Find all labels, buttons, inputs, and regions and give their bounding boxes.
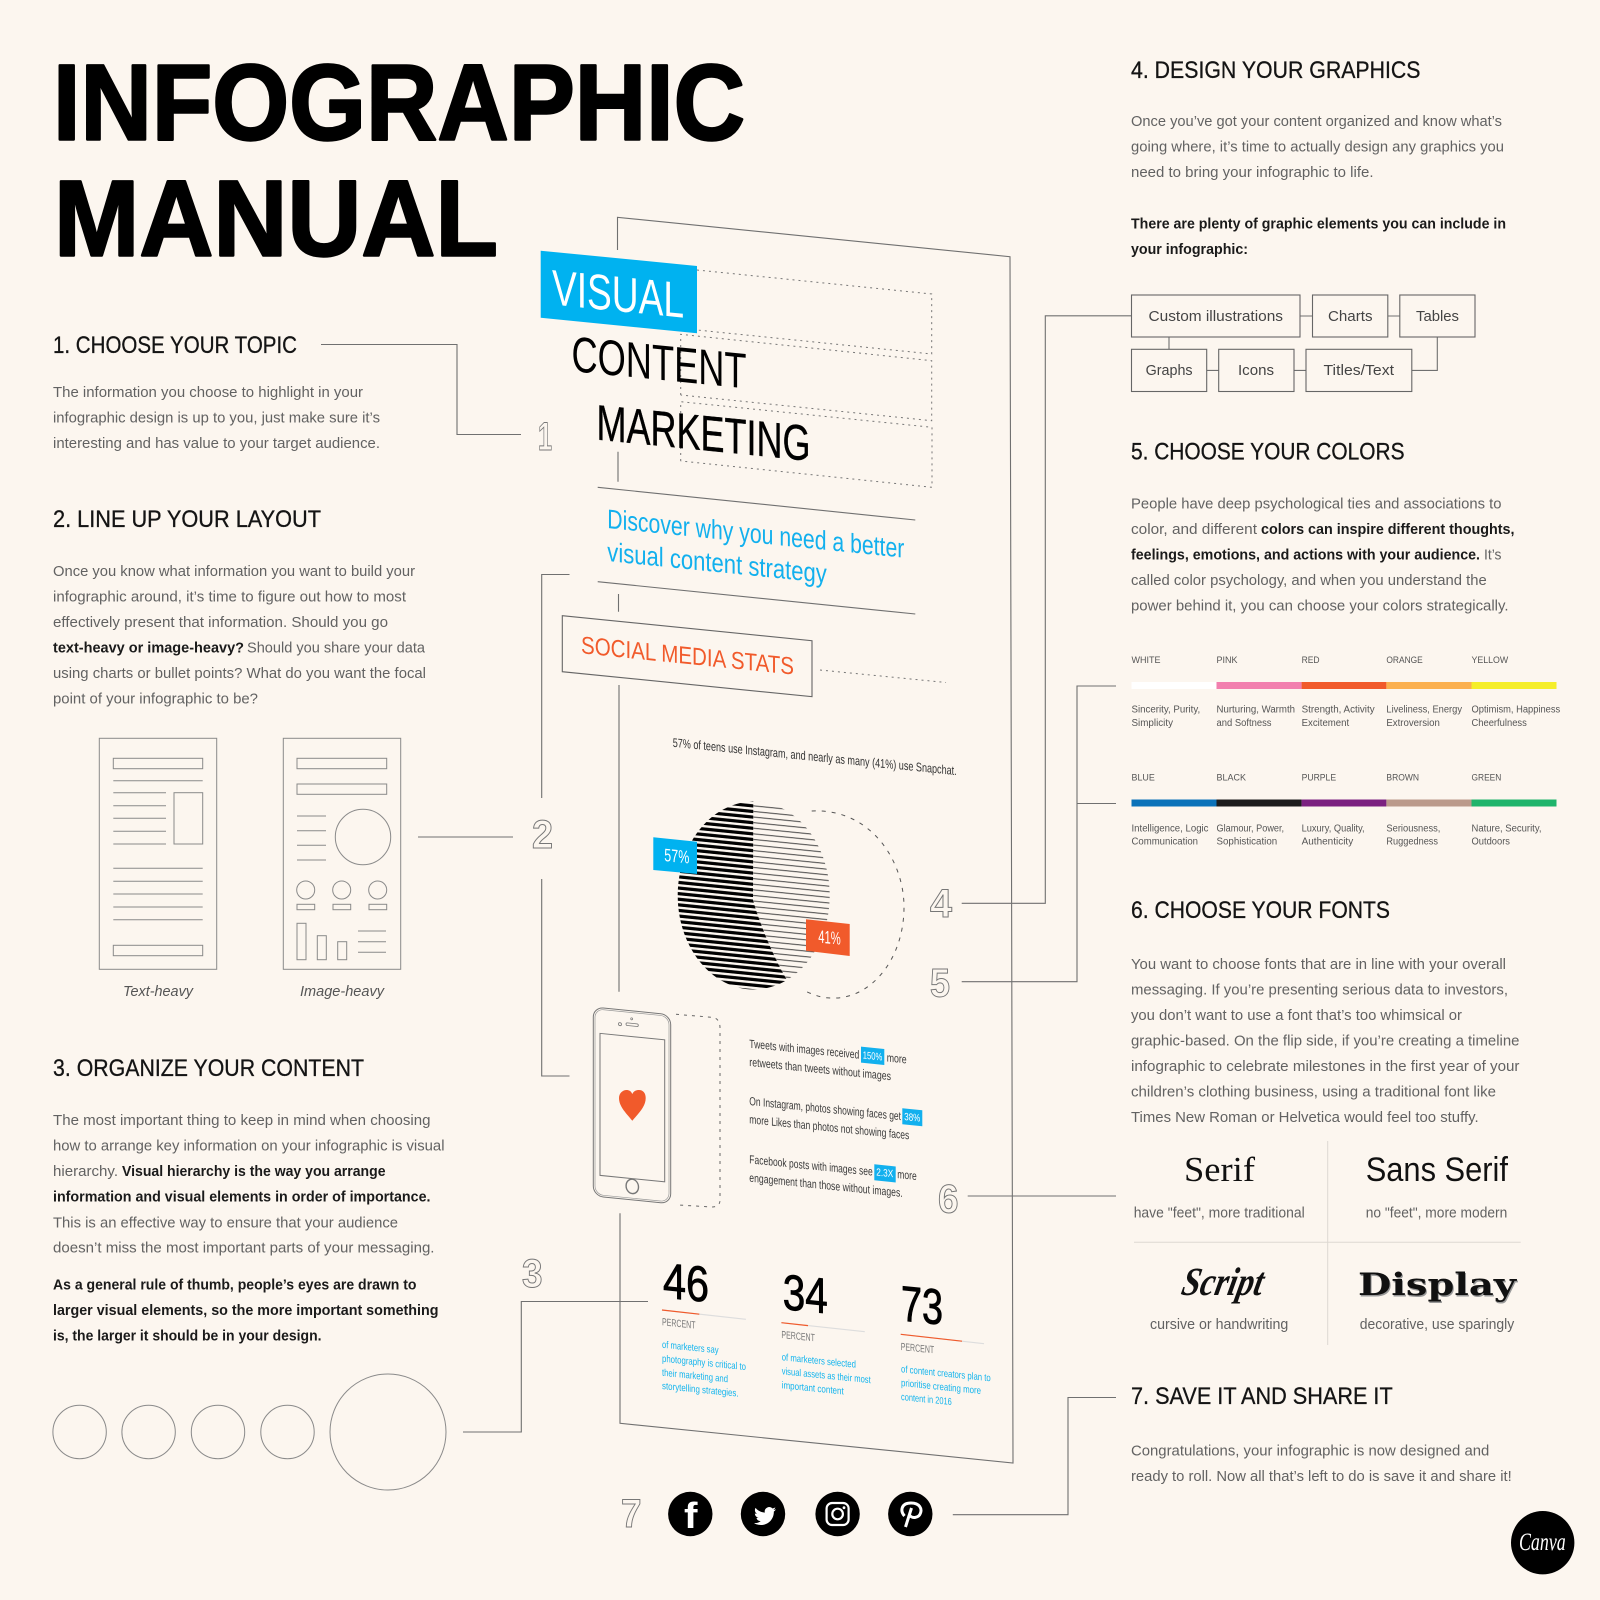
wireframe: image-heavy <box>283 738 401 1000</box>
box: charts <box>1312 295 1388 337</box>
hierarchy circles <box>53 1374 446 1490</box>
heading 2: 2. LINE UP YOUR LAYOUT <box>53 506 321 533</box>
swatch: purple: Authenticity <box>1302 836 1353 848</box>
body 6: children’s clothing business, using a traditional font like <box>1131 1084 1496 1100</box>
connector 2 short <box>418 836 513 838</box>
box: icons: Icons <box>1238 362 1274 379</box>
big stat 73: 73 <box>901 1276 943 1336</box>
swatch: white: WHITE <box>1132 655 1160 666</box>
section 6: choose your fonts <box>1131 897 1520 1126</box>
connector 5 <box>962 686 1116 982</box>
swatch: purple: PURPLE <box>1302 772 1336 784</box>
body 4: Once you’ve got your content organized and know what’s <box>1131 113 1502 130</box>
stat: tweets: more <box>887 1050 907 1066</box>
poster title: visual content marketing: VISUAL <box>552 260 684 329</box>
body 6: graphic-based. On the flip side, if you’re creating a timeline <box>1131 1032 1520 1050</box>
graphic element boxes <box>1132 295 1475 392</box>
number 6: 6 <box>938 1178 958 1222</box>
stat: tweets: retweets than tweets without images <box>749 1055 891 1083</box>
body 3: doesn’t miss the most important parts of your messaging. <box>53 1240 434 1257</box>
title: INFOGRAPHIC <box>53 42 745 162</box>
connector 3 <box>463 1302 648 1432</box>
number 3: 3 <box>522 1252 542 1296</box>
label 41% <box>806 919 850 956</box>
poster title: visual content marketing <box>541 251 810 472</box>
font sample: sans serif <box>1366 1151 1508 1222</box>
number 5: 5 <box>930 962 950 1006</box>
caption: text-heavy: Text-heavy <box>123 983 194 1000</box>
swatch: red: Excitement <box>1302 718 1349 729</box>
canva logo <box>1511 1511 1574 1574</box>
social icons <box>668 1492 932 1536</box>
swatch: green: Outdoors <box>1472 836 1510 848</box>
body 4: going where, it’s time to actually design any graphics you <box>1131 138 1504 156</box>
body 3 <box>53 1112 444 1257</box>
icon: facebook <box>668 1492 712 1536</box>
font sample: serif: Serif <box>1184 1150 1255 1189</box>
body 1: The information you choose to highlight in your <box>53 384 363 401</box>
phone shadow outline <box>676 1014 720 1207</box>
swatch: yellow: Optimism, Happiness <box>1472 704 1560 716</box>
big stat 34: visual assets as their most <box>782 1366 871 1386</box>
stat: facebook: engagement than those without images. <box>749 1171 903 1200</box>
body 7: ready to roll. Now all that’s left to do is save it and share it! <box>1131 1468 1512 1485</box>
body 6: infographic to celebrate milestones in the first year of your <box>1131 1058 1520 1075</box>
swatch: white <box>1132 655 1216 729</box>
bracket 2 <box>542 574 570 1076</box>
poster stat list <box>749 1036 922 1201</box>
number 1: 1 <box>538 415 552 459</box>
swatch: purple: Luxury, Quality, <box>1302 824 1365 834</box>
phone illustration <box>593 1007 720 1207</box>
swatch: red: RED <box>1302 655 1320 666</box>
swatch: green: Nature, Security, <box>1472 824 1542 834</box>
font sample: script <box>1150 1259 1288 1333</box>
box: tables: Tables <box>1416 308 1459 325</box>
font sample: display <box>1358 1267 1518 1333</box>
body 3: The most important thing to keep in mind when choosing <box>53 1112 430 1129</box>
body 6: messaging. If you’re presenting serious data to investors, <box>1131 982 1508 998</box>
number 2: 2 <box>532 813 553 857</box>
body 4 bold: your infographic: <box>1131 241 1248 258</box>
stat: tweets <box>749 1036 907 1085</box>
connector 1 <box>321 344 521 434</box>
swatch: orange: Liveliness, Energy <box>1386 704 1462 716</box>
font type grid <box>1134 1141 1521 1345</box>
font sample: script: Script <box>1178 1259 1270 1304</box>
body 3: how to arrange key information on your infographic is visual <box>53 1138 444 1155</box>
poster title: visual content marketing: CONTENT <box>572 326 746 399</box>
body 3 bold note: larger visual elements, so the more important something <box>53 1302 438 1319</box>
striped pie chart <box>653 801 904 998</box>
poster subtitle: Discover why you need a better <box>607 504 904 564</box>
label 57% <box>653 837 697 874</box>
swatch: blue: Intelligence, Logic <box>1132 824 1209 834</box>
stat: facebook: Facebook posts with images see <box>749 1152 873 1179</box>
poster stat sentence: 57% of teens use Instagram, and nearly as many (41%) use Snapchat. <box>673 736 957 778</box>
poster social media stats heading: SOCIAL MEDIA STATS <box>581 632 794 681</box>
body 2: point of your infographic to be? <box>53 690 258 708</box>
big stat 34 <box>781 1264 871 1398</box>
swatch: black: Sophistication <box>1216 836 1277 848</box>
stat: instagram: On Instagram, photos showing faces get <box>749 1094 902 1123</box>
font sample: serif <box>1134 1150 1305 1222</box>
section 5: choose your colors <box>1131 438 1514 614</box>
body 5: color, and different <box>1131 521 1258 538</box>
title: MANUAL <box>54 158 498 278</box>
stat: instagram <box>749 1093 922 1144</box>
swatch: brown: Seriousness, <box>1386 824 1440 834</box>
body 6: Times New Roman or Helvetica would feel too stuffy. <box>1131 1109 1479 1126</box>
font sample: sans serif: no "feet", more modern <box>1366 1205 1507 1222</box>
poster dotted title boxes <box>681 270 932 487</box>
swatch: black <box>1216 772 1302 848</box>
body 2 <box>53 563 426 708</box>
swatch: orange <box>1386 655 1472 729</box>
font sample: display: Display <box>1359 1268 1518 1304</box>
swatch: pink: and Softness <box>1216 718 1272 729</box>
dashed outline <box>807 811 904 998</box>
section 3: organize your content <box>53 1055 444 1345</box>
icon: pinterest <box>888 1492 932 1536</box>
box: custom illustrations <box>1132 295 1300 337</box>
swatch: pink <box>1216 655 1302 729</box>
swatch: black: Glamour, Power, <box>1216 824 1284 834</box>
body 2: Once you know what information you want to build your <box>53 563 415 580</box>
swatch: black: BLACK <box>1216 772 1247 784</box>
body 1 <box>53 384 380 452</box>
box: icons <box>1219 349 1294 392</box>
color swatches row 2 <box>1132 772 1556 848</box>
swatch: blue: Communication <box>1132 836 1198 848</box>
swatch: yellow: YELLOW <box>1472 655 1508 666</box>
heading 3: 3. ORGANIZE YOUR CONTENT <box>53 1055 364 1082</box>
body 7 <box>1131 1442 1512 1485</box>
box: graphs <box>1132 349 1207 392</box>
body 2: using charts or bullet points? What do you want the focal <box>53 665 426 682</box>
icon: facebook: f <box>684 1495 699 1536</box>
body 6 <box>1131 956 1520 1126</box>
poster subtitle rules <box>598 487 915 614</box>
connector 7 <box>953 1398 1116 1515</box>
stat: tweets: Tweets with images received <box>749 1037 859 1062</box>
body 5: power behind it, you can choose your colors strategically. <box>1131 598 1508 614</box>
big stat 73: prioritise creating more <box>901 1378 981 1397</box>
body 1: infographic design is up to you, just make sure it’s <box>53 410 380 426</box>
swatch: yellow <box>1472 655 1560 729</box>
swatch: orange: Extroversion <box>1386 718 1440 729</box>
body 5: It’s <box>1484 546 1502 564</box>
swatch: yellow: Cheerfulness <box>1472 718 1527 729</box>
swatch: green <box>1472 772 1556 848</box>
big stat 73: content in 2016 <box>901 1392 952 1408</box>
icon: twitter <box>741 1492 785 1536</box>
swatch: white: Simplicity <box>1132 718 1173 729</box>
swatch: pink: Nurturing, Warmth <box>1216 704 1295 716</box>
stat: instagram: more Likes than photos not showing faces <box>749 1112 909 1142</box>
big stat 34: 34 <box>783 1264 828 1324</box>
heading 4: 4. DESIGN YOUR GRAPHICS <box>1131 57 1420 84</box>
swatch: blue <box>1132 772 1216 848</box>
phone body <box>593 1007 671 1204</box>
swatch: purple <box>1302 772 1386 848</box>
body 4 bold: There are plenty of graphic elements you can include in <box>1131 216 1506 232</box>
swatch: orange: ORANGE <box>1386 655 1423 666</box>
big stat 34: important content <box>782 1380 844 1398</box>
body 3: Visual hierarchy is the way you arrange <box>122 1163 386 1180</box>
title <box>53 42 745 278</box>
poster social media stats heading <box>562 616 812 697</box>
poster subtitle: visual content strategy <box>607 537 827 589</box>
body 4 <box>1131 113 1504 181</box>
body 3: hierarchy. <box>53 1163 118 1180</box>
box: titles/text <box>1306 349 1412 392</box>
box: tables <box>1400 295 1475 337</box>
body 5: People have deep psychological ties and associations to <box>1131 496 1502 512</box>
stat: facebook: 2.3X <box>876 1167 893 1180</box>
font sample: serif: have "feet", more traditional <box>1134 1205 1305 1222</box>
font sample: sans serif: Sans Serif <box>1366 1151 1508 1189</box>
connector 6 <box>968 1195 1116 1197</box>
label 41%: 41% <box>818 927 841 949</box>
heading 1: 1. CHOOSE YOUR TOPIC <box>53 332 297 359</box>
big stat 73: of content creators plan to <box>901 1364 991 1384</box>
stat: tweets: 150% <box>863 1050 882 1063</box>
section 4: design your graphics <box>1131 57 1506 258</box>
body 5: colors can inspire different thoughts, <box>1261 521 1514 538</box>
big stat 46 <box>662 1253 746 1400</box>
section 1: choose your topic <box>53 332 380 452</box>
number 7: 7 <box>621 1492 642 1536</box>
body 7: Congratulations, your infographic is now designed and <box>1131 1442 1489 1460</box>
swatch: brown <box>1386 772 1472 848</box>
big stat 46: PERCENT <box>662 1316 696 1332</box>
box: custom illustrations: Custom illustrations <box>1148 308 1283 325</box>
swatch: red: Strength, Activity <box>1302 704 1375 716</box>
body 3: This is an effective way to ensure that your audience <box>53 1214 398 1231</box>
big stat 46: their marketing and <box>662 1368 728 1385</box>
stat: facebook <box>749 1152 917 1201</box>
wireframe: text-heavy <box>99 738 217 1000</box>
body 2: text-heavy or image-heavy? <box>53 640 244 656</box>
swatch: pink: PINK <box>1216 655 1238 666</box>
swatch: blue: BLUE <box>1132 772 1155 784</box>
swatch: brown: BROWN <box>1386 772 1419 784</box>
body 3 bold note: is, the larger it should be in your design. <box>53 1328 322 1345</box>
body 6: you don’t want to use a font that’s too whimsical or <box>1131 1007 1462 1024</box>
box: titles/text: Titles/Text <box>1324 362 1395 379</box>
font sample: display: decorative, use sparingly <box>1360 1316 1515 1333</box>
poster subtitle <box>607 504 904 589</box>
body 4: need to bring your infographic to life. <box>1131 164 1374 181</box>
big stat 34: PERCENT <box>781 1329 815 1344</box>
body 6: You want to choose fonts that are in line with your overall <box>1131 956 1506 973</box>
big stat 73 <box>901 1276 991 1408</box>
swatch: brown: Ruggedness <box>1386 836 1438 848</box>
swatch: green: GREEN <box>1472 772 1501 784</box>
icon: instagram <box>815 1492 860 1536</box>
body 3: information and visual elements in order of importance. <box>53 1189 430 1206</box>
box: graphs: Graphs <box>1146 362 1193 379</box>
label 57%: 57% <box>664 845 689 867</box>
dotted rule <box>820 670 946 682</box>
font sample: display: Display <box>1358 1267 1517 1303</box>
connector 4 <box>962 316 1132 903</box>
font sample: script: cursive or handwriting <box>1150 1316 1288 1333</box>
heading 7: 7. SAVE IT AND SHARE IT <box>1131 1383 1393 1410</box>
body 5: feelings, emotions, and actions with your audience. <box>1131 546 1480 564</box>
blue highlight <box>541 251 697 333</box>
swatch: white: Sincerity, Purity, <box>1132 704 1200 716</box>
body 5 <box>1131 496 1514 614</box>
body 4 bold <box>1131 216 1506 258</box>
body 5: called color psychology, and when you understand the <box>1131 572 1487 589</box>
big stat 46: 46 <box>663 1253 709 1313</box>
section 7: save it and share it <box>1131 1383 1512 1485</box>
color swatches row 1 <box>1132 655 1560 729</box>
canva logo: Canva <box>1519 1529 1566 1556</box>
swatch: red <box>1302 655 1386 729</box>
body 3 bold note <box>53 1276 438 1345</box>
big stat 46: photography is critical to <box>662 1354 746 1373</box>
big stat 46: of marketers say <box>662 1340 719 1356</box>
caption: image-heavy: Image-heavy <box>300 983 385 1000</box>
number 4: 4 <box>930 882 953 926</box>
body 1: interesting and has value to your target audience. <box>53 435 380 452</box>
big stat 46: storytelling strategies. <box>662 1381 739 1400</box>
icon: heart <box>619 1090 646 1121</box>
heading 6: 6. CHOOSE YOUR FONTS <box>1131 897 1390 924</box>
stat: facebook: more <box>897 1167 917 1183</box>
body 3 bold note: As a general rule of thumb, people’s eyes are drawn to <box>53 1276 416 1293</box>
big stat 34: of marketers selected <box>782 1352 856 1371</box>
stat: instagram: 38% <box>904 1111 920 1125</box>
box: charts: Charts <box>1328 308 1372 325</box>
poster frame <box>618 217 1013 1463</box>
body 2: effectively present that information. Should you go <box>53 614 388 631</box>
section 2: line up your layout <box>53 506 426 708</box>
heading 5: 5. CHOOSE YOUR COLORS <box>1131 438 1404 466</box>
body 2: Should you share your data <box>247 640 426 656</box>
poster title: visual content marketing: MARKETING <box>596 395 810 472</box>
big stat 73: PERCENT <box>901 1341 935 1356</box>
body 2: infographic around, it’s time to figure out how to most <box>53 588 407 606</box>
